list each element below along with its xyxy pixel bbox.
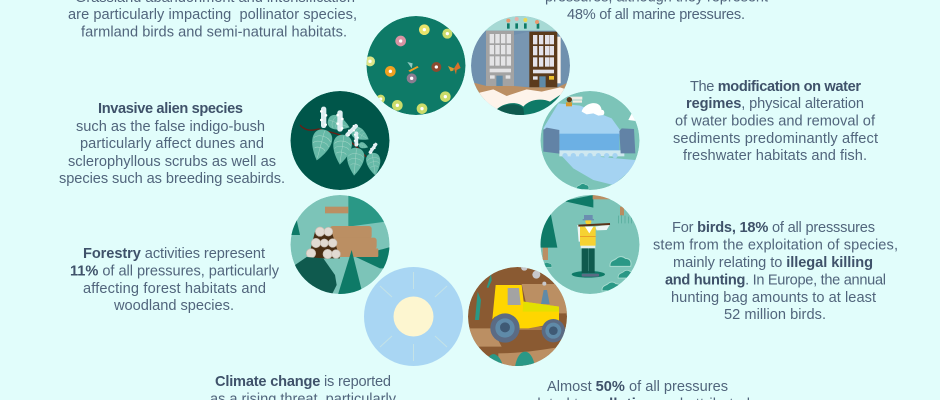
text: bird exploitation: 52 million birds.: [724, 307, 826, 323]
icon: hunter with rifle: [537, 195, 640, 294]
text: water regimes: of water bodies and removal of: [675, 114, 876, 130]
icon: tractor: [468, 264, 568, 367]
text: grassland and agriculture: farmland birds and semi-natural habitats.: [81, 24, 347, 40]
text: invasive alien species: such as the false indigo-bush: [76, 119, 265, 135]
text: invasive alien species: species such as breeding seabirds.: [59, 171, 285, 187]
icon: invasive plant leaves: [290, 91, 390, 190]
text: forestry: woodland species.: [113, 298, 234, 314]
text: forestry: Forestry activities represent: [83, 246, 265, 262]
text: invasive alien species: Invasive alien species: [98, 101, 243, 117]
text: bird exploitation: [653, 220, 898, 323]
text: invasive alien species: sclerophyllous scrubs as well as: [68, 154, 276, 170]
text: invasive alien species: particularly affect dunes and: [80, 136, 264, 152]
text: bird exploitation: For birds, 18% of all presssures: [672, 220, 875, 236]
text: pollution: [524, 379, 750, 400]
text: water regimes: sediments predominantly affect: [673, 131, 878, 147]
text: climate change: Climate change is reported: [215, 374, 391, 390]
icon: forestry logs: [290, 195, 392, 298]
text: forestry: affecting forest habitats and: [83, 281, 266, 297]
text: water regimes: freshwater habitats and fish.: [683, 148, 867, 164]
icon: dam and water regime: [540, 91, 640, 190]
text: bird exploitation: hunting bag amounts to at least: [671, 290, 876, 306]
text: climate change: [210, 374, 397, 400]
text: water regimes: [673, 79, 878, 164]
text: forestry: [70, 246, 280, 314]
text: pollution: Almost 50% of all pressures: [547, 379, 728, 395]
text: marine pressures: 48% of all marine pressures.: [567, 7, 745, 23]
text: bird exploitation: mainly relating to illegal killing: [673, 255, 873, 271]
text: water regimes: regimes, physical alteration: [686, 96, 864, 112]
icon: sun for climate change: [364, 267, 463, 366]
text: grassland and agriculture: are particularly impacting pollinator species,: [68, 7, 357, 23]
text: invasive alien species: [59, 101, 285, 187]
icon: urban buildings: [471, 16, 570, 115]
text: bird exploitation: and hunting. In Europe, the annual: [665, 272, 886, 288]
text: forestry: 11% of all pressures, particularly: [70, 264, 280, 280]
text: marine pressures: [545, 0, 768, 23]
text: water regimes: The modification on water: [690, 79, 861, 95]
text: bird exploitation: stem from the exploitation of species,: [653, 238, 898, 254]
text: grassland and agriculture: [68, 0, 357, 40]
icon: agriculture flowers and pollinators: [365, 16, 466, 115]
